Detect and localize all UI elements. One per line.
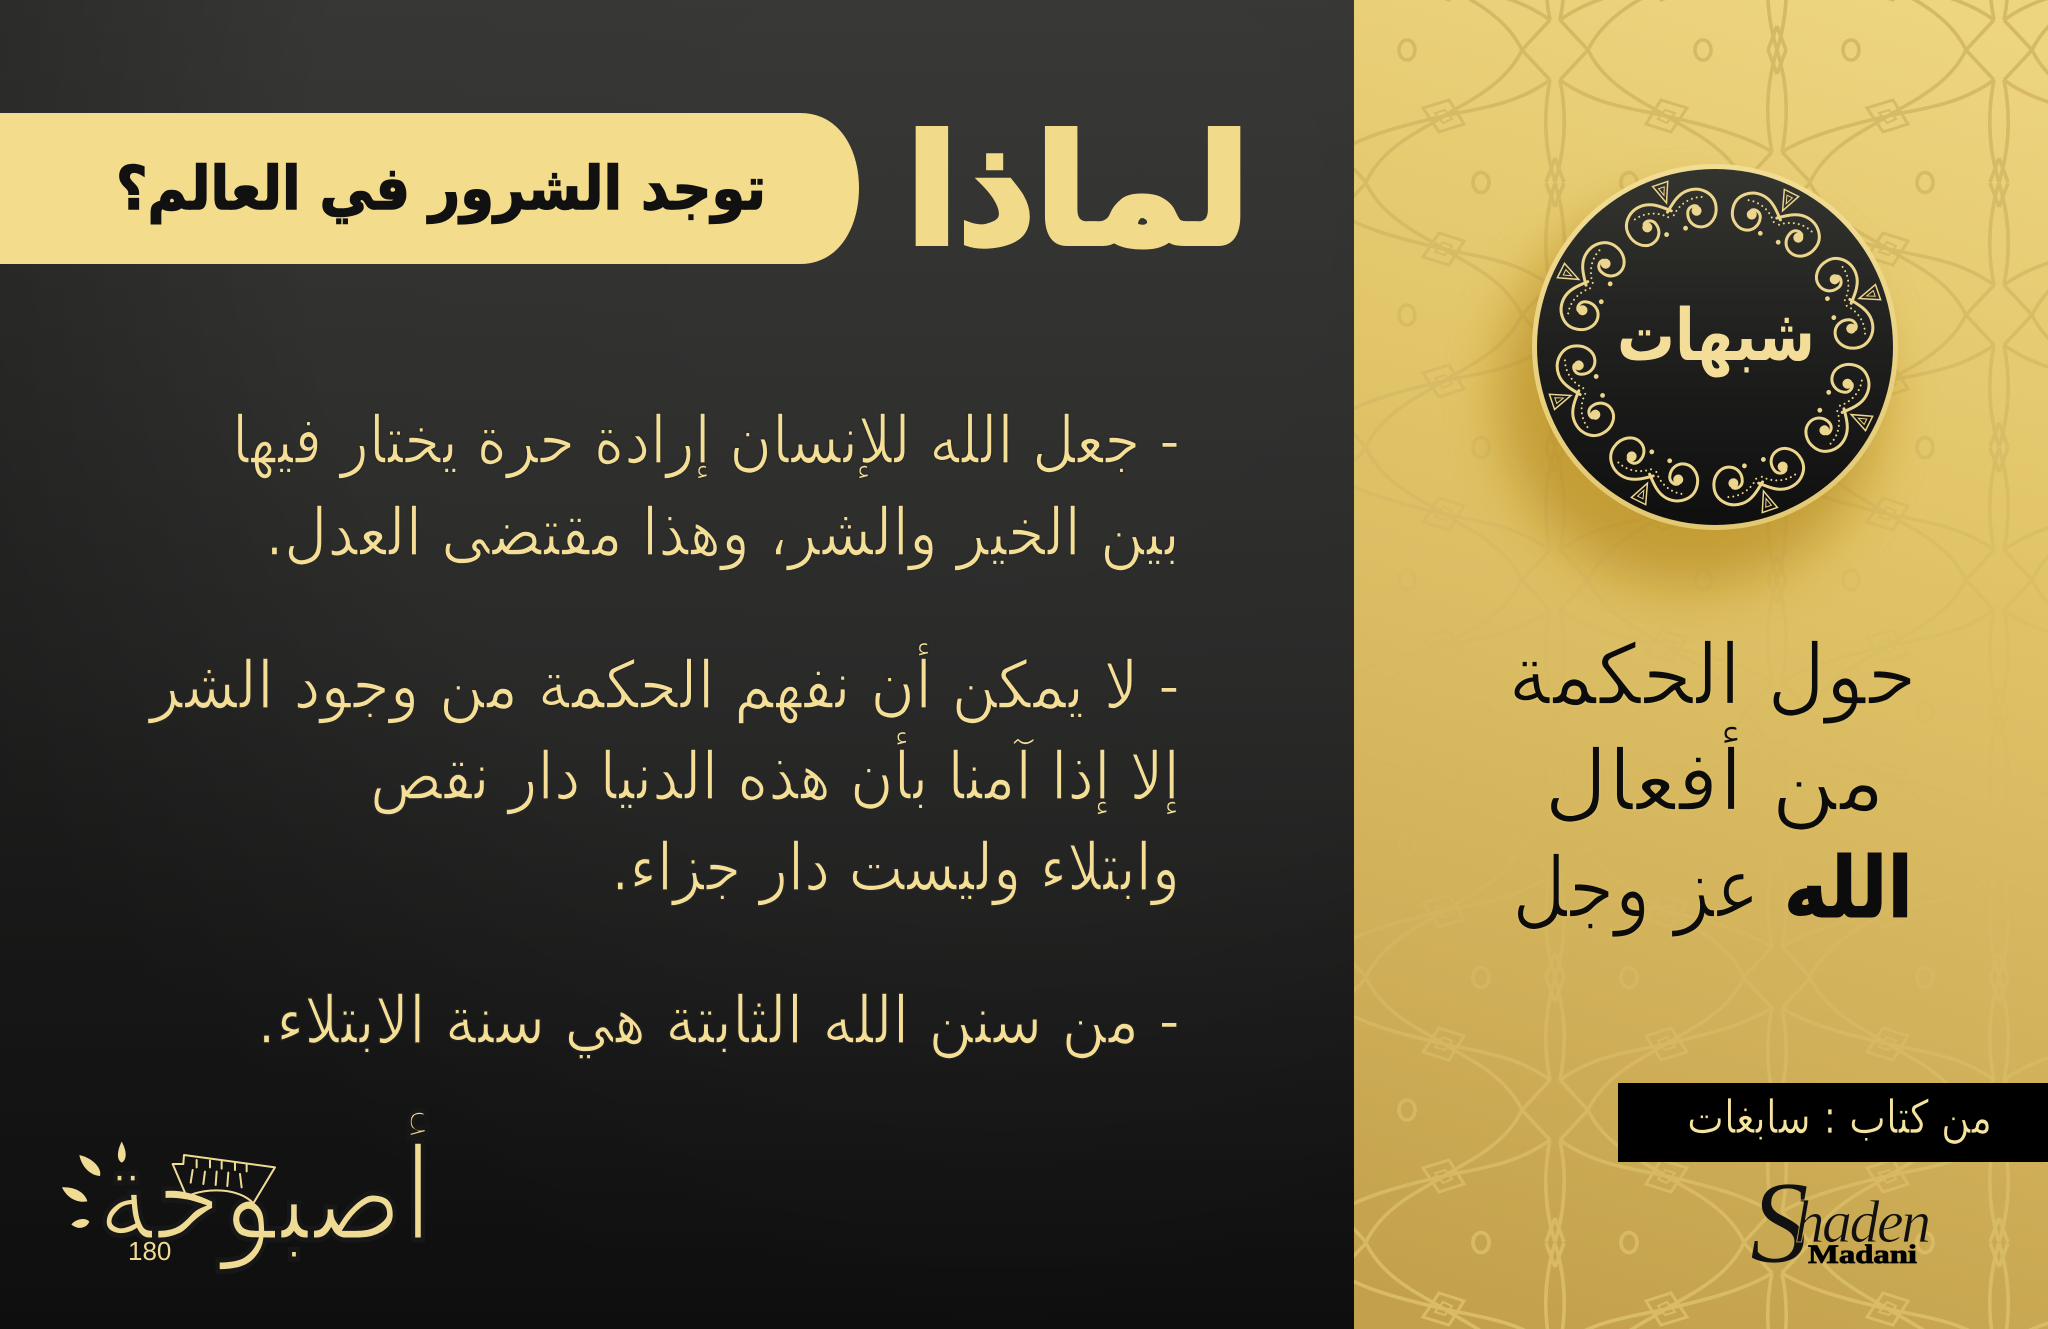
- text block: point one: - جعل الله للإنسان إرادة حرة يختار فيها: [232, 402, 1180, 480]
- logo: Osboha 180: 180: [128, 1236, 171, 1266]
- text block: topic title: [1508, 626, 1917, 938]
- logo: Osboha 180: أصبوحة: [97, 1110, 433, 1272]
- text block: topic title: من أفعال: [1544, 726, 1885, 831]
- badge: circular seal: [1532, 164, 1898, 530]
- text block: point two: - لا يمكن أن نفهم الحكمة من وجود الشر: [147, 642, 1180, 724]
- signature: Madani: [1808, 1240, 1917, 1269]
- signature: haden: [1794, 1189, 1929, 1255]
- signature: S: [1750, 1157, 1808, 1288]
- text block: point one: [232, 402, 1180, 571]
- text block: point two: [147, 642, 1180, 906]
- text block: topic title: الله عز وجل: [1512, 839, 1913, 938]
- text block: point two: وابتلاء وليست دار جزاء.: [611, 829, 1180, 906]
- badge label: شبهات: [1617, 293, 1815, 378]
- ornament ring: [1537, 169, 1893, 525]
- source label bar: من كتاب : سابغات: [1687, 1090, 1992, 1145]
- panel: dark background: [0, 0, 1354, 1329]
- heading subtitle in pill: توجد الشرور في العالم؟: [116, 154, 766, 224]
- badge shadow: [1498, 203, 1882, 587]
- signature: [1750, 1157, 1929, 1288]
- heading: why: لماذا: [906, 105, 1250, 279]
- text block: point two: إلا إذا آمنا بأن هذه الدنيا دار نقص: [370, 731, 1180, 816]
- text block: point three: - من سنن الله الثابتة هي سنة الابتلاء.: [257, 982, 1180, 1059]
- heading pill: [0, 113, 859, 264]
- panel: gold background with geometric pattern: [1354, 0, 2048, 1329]
- text block: point one: بين الخير والشر، وهذا مقتضى العدل.: [265, 494, 1180, 571]
- text block: topic title: حول الحكمة: [1508, 626, 1917, 725]
- source label bar: [1618, 1083, 2048, 1162]
